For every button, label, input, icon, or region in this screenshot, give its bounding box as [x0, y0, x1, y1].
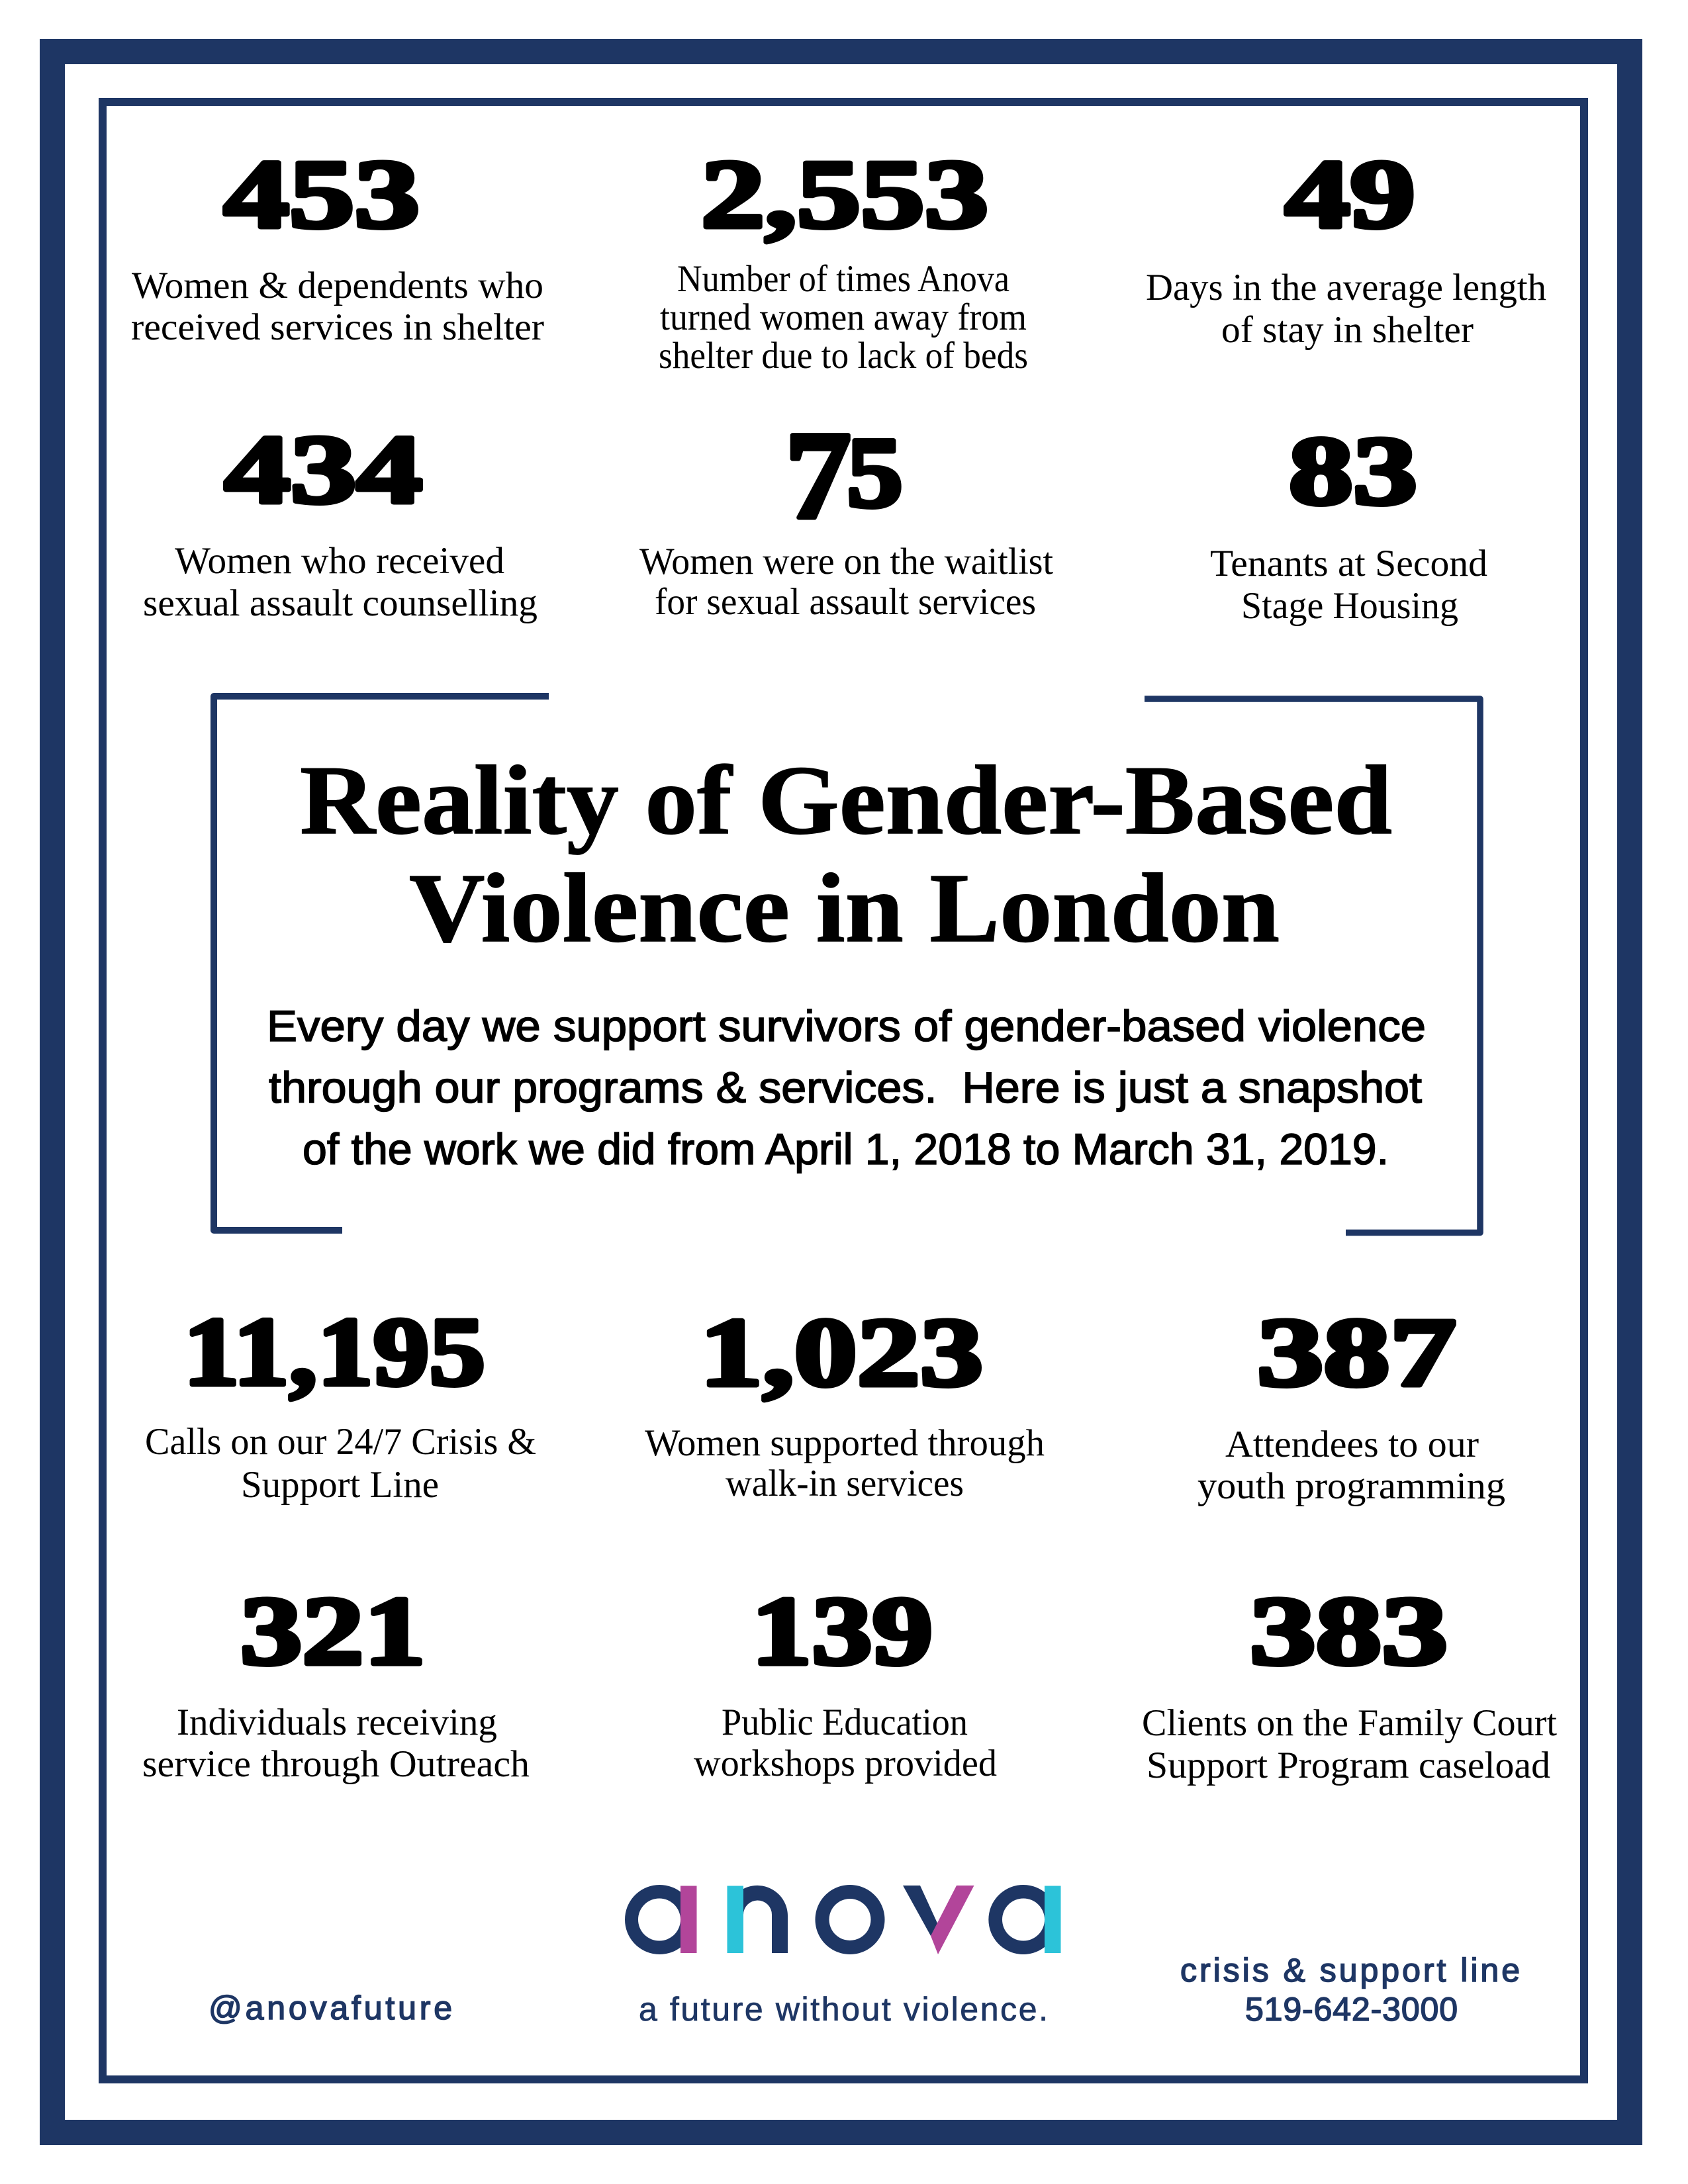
stat: 139 workshops: 139	[751, 1577, 933, 1686]
bracket: top left	[214, 696, 549, 1230]
crisis line: 519-642-3000	[1245, 1991, 1458, 2028]
stat: 49 days: of stay in shelter	[1221, 309, 1474, 351]
stat: 434 counselling: sexual assault counselling	[143, 582, 538, 624]
stat: 139 workshops	[694, 1577, 997, 1784]
tagline: a future without violence.	[639, 1991, 1048, 2028]
stat: 49 days: 49	[1285, 140, 1415, 249]
stat: 83 tenants	[1210, 417, 1487, 627]
intro text: Every day we support survivors of gender-based violence	[267, 1001, 1426, 1050]
stat: 139 workshops: workshops provided	[694, 1743, 997, 1784]
stat: 383 family court: Support Program caseload	[1147, 1745, 1550, 1786]
intro text: of the work we did from April 1, 2018 to March 31, 2019.	[303, 1124, 1389, 1173]
social handle: @anovafuture	[209, 1989, 452, 2026]
stat: 453 women and dependents: 453	[224, 140, 420, 249]
title	[300, 746, 1392, 963]
stat: 83 tenants: Stage Housing	[1241, 585, 1458, 627]
stat: 1,023 walk-in: Women supported through	[645, 1422, 1045, 1464]
stat: 1,023 walk-in: 1,023	[700, 1298, 983, 1407]
crisis line: crisis & support line	[1180, 1952, 1520, 1989]
stat: 434 counselling	[143, 416, 538, 624]
stat: 1,023 walk-in	[645, 1298, 1045, 1504]
stat: 2,553 turned away: shelter due to lack of beds	[659, 335, 1028, 377]
stat: 321 outreach: 321	[240, 1577, 426, 1686]
logo: anova	[625, 1885, 1060, 1954]
stat: 1,023 walk-in: walk-in services	[726, 1463, 964, 1504]
stat: 75 waitlist	[639, 406, 1053, 623]
stat: 83 tenants: Tenants at Second	[1210, 543, 1487, 584]
stat: 453 women and dependents	[131, 140, 544, 348]
stat: 2,553 turned away: 2,553	[701, 140, 988, 249]
stat: 49 days	[1146, 140, 1546, 351]
stat: 11,195 calls: Calls on our 24/7 Crisis &	[145, 1421, 536, 1463]
stat: 11,195 calls: 11,195	[183, 1298, 485, 1406]
title: Violence in London	[409, 854, 1280, 963]
stat: 75 waitlist: Women were on the waitlist	[639, 541, 1053, 582]
stat: 75 waitlist: 5	[847, 417, 903, 528]
stat: 11,195 calls: Support Line	[241, 1464, 439, 1506]
stat: 453 women and dependents: Women & dependents who	[132, 265, 543, 306]
stat: 387 youth: Attendees to our	[1225, 1424, 1479, 1465]
stat: 321 outreach: service through Outreach	[142, 1743, 530, 1785]
stat: 383 family court: 383	[1250, 1577, 1448, 1686]
stat: 383 family court	[1142, 1577, 1557, 1786]
bracket: bottom right	[1145, 699, 1480, 1232]
stat: 139 workshops: Public Education	[722, 1702, 968, 1743]
stat: 11,195 calls	[145, 1298, 536, 1506]
stat: 2,553 turned away	[659, 140, 1028, 377]
stat: 49 days: Days in the average length	[1146, 267, 1546, 308]
crisis line	[1180, 1952, 1520, 2028]
stat: 321 outreach	[142, 1577, 530, 1785]
title: Reality of Gender-Based	[300, 746, 1392, 855]
stat: 75 waitlist: 7	[785, 406, 851, 545]
stat: 434 counselling: 434	[224, 416, 422, 524]
stat: 2,553 turned away: turned women away from	[660, 296, 1027, 338]
stat: 453 women and dependents: received services in shelter	[131, 306, 544, 348]
stat: 83 tenants: 83	[1289, 417, 1417, 525]
stat: 383 family court: Clients on the Family Court	[1142, 1702, 1557, 1744]
stat: 2,553 turned away: Number of times Anova	[677, 258, 1009, 300]
stat: 387 youth: 387	[1257, 1298, 1456, 1407]
intro text: through our programs & services. Here is just a snapshot	[269, 1063, 1422, 1112]
inner border	[103, 102, 1584, 2079]
stat: 434 counselling: Women who received	[175, 540, 504, 582]
stat: 75 waitlist: for sexual assault services	[655, 581, 1036, 623]
stat: 321 outreach: Individuals receiving	[177, 1702, 497, 1743]
stat: 387 youth: youth programming	[1197, 1465, 1505, 1507]
intro text	[267, 1001, 1426, 1173]
stat: 387 youth	[1197, 1298, 1505, 1507]
